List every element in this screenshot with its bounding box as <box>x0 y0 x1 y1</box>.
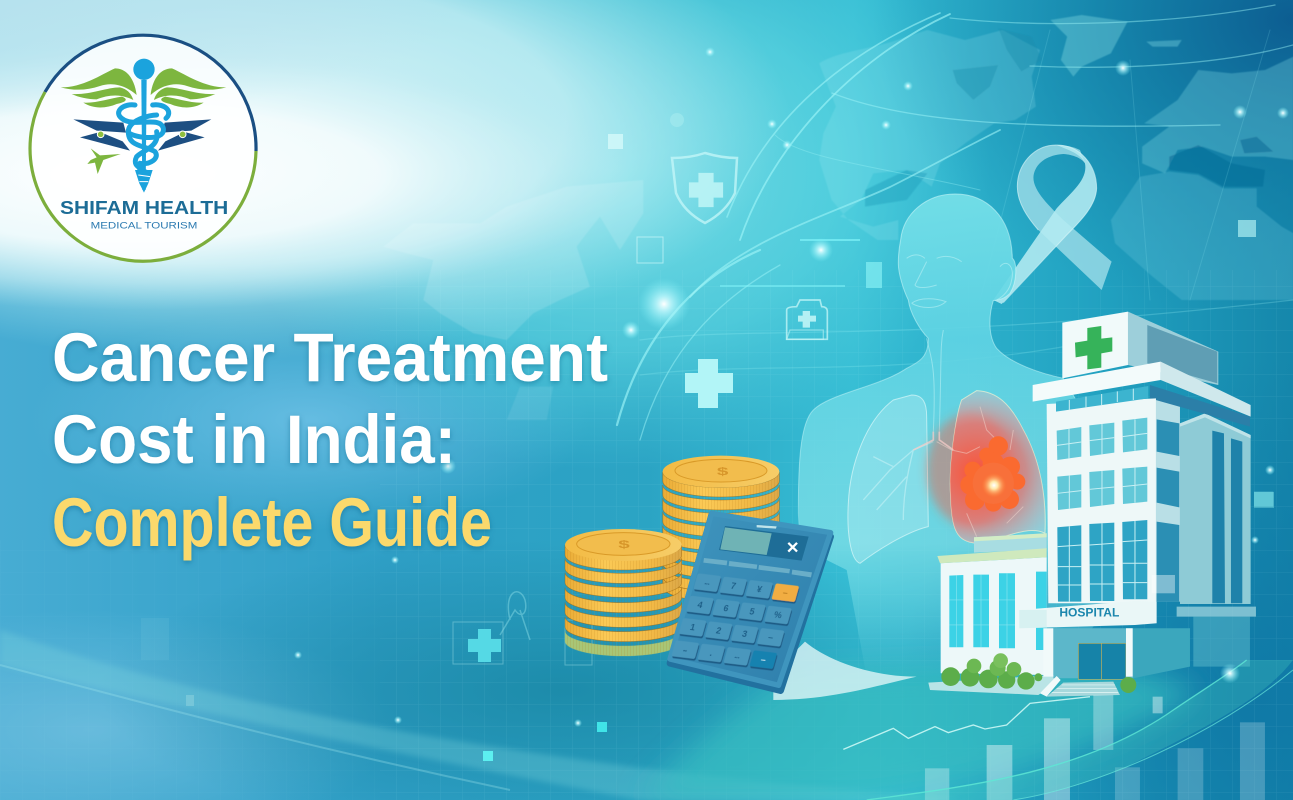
human figure <box>798 194 1113 677</box>
paper receipt <box>773 642 917 700</box>
coins: front stack: $ <box>618 538 631 551</box>
icon: green cross <box>1075 326 1112 369</box>
icon: small cross in frame <box>453 622 503 664</box>
calculator: keypad: 6 <box>722 603 730 614</box>
grid lines <box>0 270 1293 800</box>
calculator: keypad: 7 <box>730 581 737 591</box>
logo badge <box>30 34 256 261</box>
calculator: keypad: – <box>782 587 789 598</box>
calculator: keypad <box>671 573 799 669</box>
coins: rear stack: $ <box>717 465 729 478</box>
calculator: keypad: 5 <box>748 607 756 617</box>
logo: navy wings <box>73 119 211 151</box>
icon: shield with cross <box>672 153 737 223</box>
icon: medical case <box>787 300 827 339</box>
bottom left swoosh band <box>0 630 960 800</box>
calculator: keypad: 3 <box>741 629 748 639</box>
floor beneath hospital <box>640 660 1200 800</box>
bushes <box>941 653 1042 690</box>
coins: front stack <box>565 529 682 656</box>
logo: caduceus <box>119 59 169 193</box>
tower: side windows <box>1157 419 1179 602</box>
tower: front windows <box>1057 418 1147 602</box>
growth swoosh and bar chart <box>843 660 1293 800</box>
coins: rear stack <box>663 456 779 602</box>
globe arcs <box>617 5 1293 440</box>
chart: swoosh lines <box>867 660 1293 800</box>
calculator: keypad: 4 <box>696 600 704 610</box>
calculator: keypad: 2 <box>715 626 722 636</box>
calculator: function bar <box>703 558 812 577</box>
tower: front wall <box>1047 398 1156 603</box>
icon: cross <box>685 359 733 408</box>
figure: tumour <box>960 436 1025 512</box>
logo: green wings <box>61 68 226 107</box>
floating squares and frames <box>141 113 1274 761</box>
light streaks and sparkles <box>294 47 1289 727</box>
logo: white disc <box>30 34 256 260</box>
figure: left lung <box>848 395 933 563</box>
tower: sign band: HOSPITAL <box>1059 606 1120 620</box>
icon: awareness ribbon <box>993 145 1112 304</box>
calculator: display: × <box>787 536 799 559</box>
main hospital tower <box>1019 312 1273 697</box>
tower: roof slab <box>1033 362 1251 427</box>
calculator: keypad: 1 <box>689 622 696 633</box>
title: line 2: Cost in India: <box>52 401 456 478</box>
world map: centre left <box>383 180 643 420</box>
tower: entrance <box>1040 628 1190 697</box>
logo: plane <box>87 148 121 174</box>
figure: right lung with tumour <box>913 391 1045 543</box>
logo: ring <box>30 35 256 261</box>
calculator: keypad: % <box>773 610 783 620</box>
calculator: keypad: – <box>767 632 774 643</box>
low hospital wing <box>928 533 1060 695</box>
tower: sign block <box>1062 312 1218 385</box>
chart: bars <box>925 695 1265 800</box>
title: line 1: Cancer Treatment <box>52 319 608 396</box>
world map: right <box>819 15 1293 300</box>
chart: trend line <box>843 697 1090 749</box>
title: line 3: Complete Guide <box>52 484 492 561</box>
title <box>52 319 608 561</box>
figure: body silhouette <box>798 194 1113 677</box>
tower: sign band <box>1019 601 1157 628</box>
icon: faint ribbon left <box>500 592 530 640</box>
calculator: keypad: – <box>760 654 767 665</box>
calculator: keypad: •• <box>682 648 688 654</box>
logo: name: SHIFAM HEALTH <box>60 197 228 218</box>
calculator: keypad: ••• <box>734 656 740 661</box>
tower: right wing <box>1177 413 1256 667</box>
calculator: keypad: ¥ <box>756 584 763 595</box>
calculator: body <box>670 513 831 691</box>
calculator <box>670 513 831 691</box>
calculator: keypad: . <box>709 648 714 658</box>
calculator: display <box>719 525 809 561</box>
tower: side wall <box>1156 398 1180 602</box>
figure: face details <box>907 255 1012 432</box>
logo: tagline: MEDICAL TOURISM <box>91 221 197 231</box>
calculator: keypad: ••• <box>704 582 710 588</box>
